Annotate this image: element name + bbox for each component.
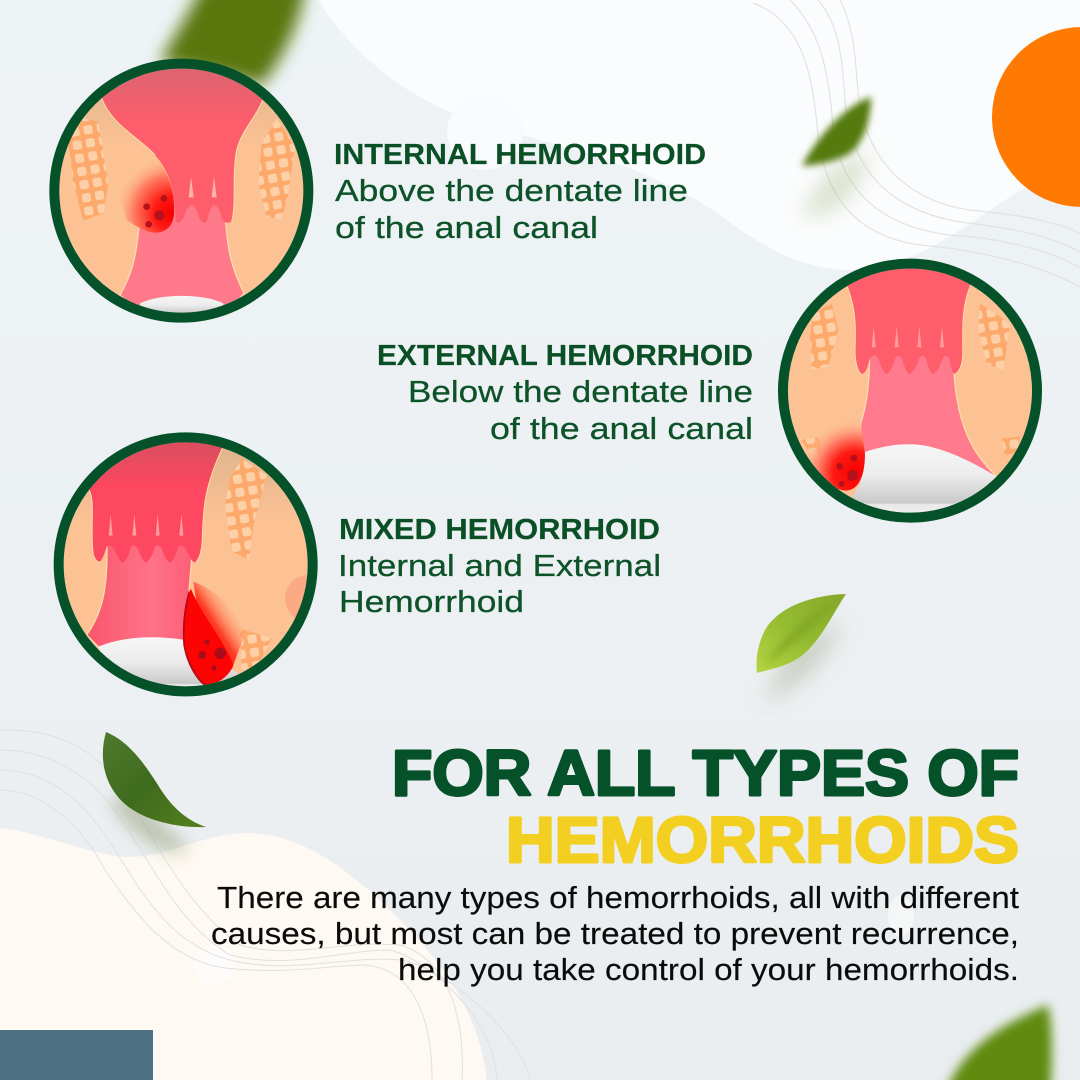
- body text: causes, but most can be treated to prevent recurrence,: [211, 916, 1019, 951]
- blurred leaf top: [160, 0, 306, 85]
- circle illustration: internal: [54, 63, 308, 318]
- text: external hemorrhoid: EXTERNAL HEMORRHOID: [377, 340, 753, 372]
- heading: [392, 737, 1019, 876]
- body text: help you take control of your hemorrhoids.: [398, 952, 1019, 987]
- leaf: dark green: [103, 732, 206, 853]
- heading: FOR ALL TYPES OF: [392, 737, 1019, 809]
- leaf: bright green: [757, 594, 846, 700]
- panel: mixed hemorrhoid: [59, 435, 661, 692]
- slate rectangle: [0, 1030, 153, 1080]
- decorative contour lines bottom left: [0, 730, 530, 1080]
- background shape: small pale dots: [194, 896, 914, 985]
- text: mixed hemorrhoid: [338, 514, 661, 619]
- blurred leaf bottom right: [945, 1005, 1052, 1080]
- text: external hemorrhoid: [377, 340, 753, 446]
- text: external hemorrhoid: of the anal canal: [490, 411, 753, 446]
- body text: [211, 880, 1019, 987]
- heading: HEMORRHOIDS: [506, 804, 1019, 876]
- text: mixed hemorrhoid: Hemorrhoid: [339, 584, 524, 619]
- panel: internal hemorrhoid: [54, 63, 706, 318]
- text: internal hemorrhoid: INTERNAL HEMORRHOID: [334, 139, 706, 171]
- circle illustration: external: [783, 263, 1037, 518]
- orange circle: [992, 27, 1080, 207]
- text: mixed hemorrhoid: MIXED HEMORRHOID: [339, 514, 660, 546]
- text: mixed hemorrhoid: Internal and External: [338, 548, 661, 583]
- body text: There are many types of hemorrhoids, all with different: [217, 880, 1019, 915]
- text: internal hemorrhoid: [334, 139, 706, 245]
- decorative contour lines top right: [753, 0, 1080, 287]
- panel: external hemorrhoid: [377, 263, 1037, 518]
- background shape: small white dot: [447, 94, 523, 170]
- text: external hemorrhoid: Below the dentate line: [408, 374, 753, 409]
- circle illustration: mixed: [59, 435, 332, 692]
- text: internal hemorrhoid: of the anal canal: [335, 210, 598, 245]
- background shape: white blob: [318, 0, 1080, 270]
- background shape: cream blob: [0, 828, 487, 1080]
- blurred leaf right: [800, 97, 871, 216]
- text: internal hemorrhoid: Above the dentate line: [335, 173, 688, 208]
